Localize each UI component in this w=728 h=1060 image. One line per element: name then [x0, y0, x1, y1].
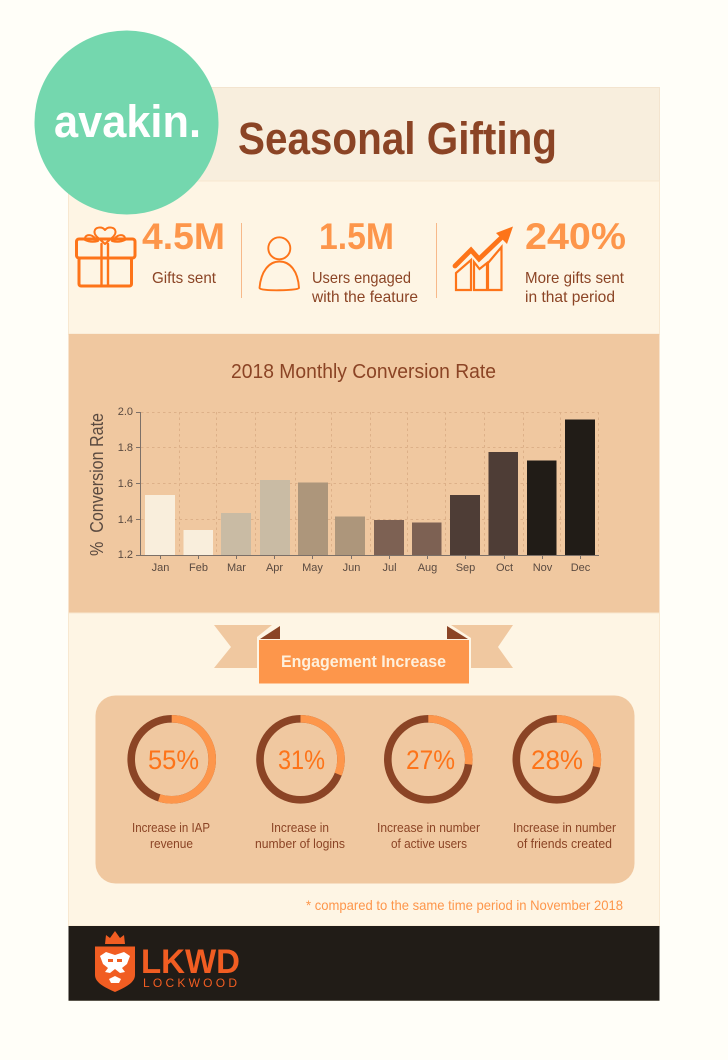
y axis labels: 1.2: [118, 549, 133, 561]
x axis labels: Feb: [189, 562, 208, 574]
x axis labels: Apr: [266, 562, 283, 574]
panel: engagement increase: [68, 613, 660, 926]
stat value: 4.5M: 4.5M: [142, 216, 225, 257]
x axis labels: Nov: [533, 562, 553, 574]
donut: 27% active users: [377, 719, 481, 851]
icon: person: [260, 237, 299, 290]
x axis labels: Jun: [343, 562, 360, 574]
icon: rising chart: [455, 226, 513, 290]
x axis labels: Jul: [382, 562, 397, 574]
donut: 27% active users: Increase in number: [377, 820, 481, 835]
donut: 28% friends created: of friends created: [517, 836, 612, 851]
stat: more gifts: [455, 216, 626, 306]
bars: [145, 420, 595, 555]
stat label: users engaged: [311, 270, 418, 306]
donut: 55% IAP revenue: [131, 719, 212, 851]
x axis labels: Oct: [496, 562, 513, 574]
stat label: users engaged: Users engaged: [312, 270, 411, 287]
stat label: more gifts sent: [525, 270, 625, 306]
donut: 31% logins: 31%: [278, 745, 325, 775]
y axis labels: [118, 406, 133, 561]
stat: gifts sent: [76, 216, 225, 287]
donut: 31% logins: number of logins: [255, 836, 345, 851]
x axis labels: Aug: [418, 562, 437, 574]
y axis labels: 1.6: [118, 478, 133, 490]
y axis labels: 1.8: [118, 442, 133, 454]
x axis labels: Mar: [227, 562, 246, 574]
donut: 55% IAP revenue: revenue: [150, 836, 193, 851]
donut: 28% friends created: 28%: [531, 745, 583, 775]
panel: donut metrics: [96, 696, 634, 884]
panel: key stats: [68, 181, 660, 334]
logo: avakin badge: [34, 30, 218, 214]
donut: 31% logins: [255, 719, 345, 851]
icon: lion shield: [95, 946, 135, 992]
x axis labels: May: [302, 562, 323, 574]
logo: avakin badge: avakin.: [54, 96, 201, 147]
logo: lockwood: [95, 931, 240, 992]
panel: monthly conversion rate: [68, 334, 660, 613]
donut: 28% friends created: [513, 719, 617, 851]
stat value: 1.5M: 1.5M: [319, 216, 394, 257]
x axis labels: Jan: [152, 562, 169, 574]
y axis title: % Conversion Rate: [87, 413, 107, 556]
x axis labels: [152, 562, 591, 574]
donut: 31% logins: Increase in: [271, 820, 329, 835]
chart title: 2018 Monthly Conversion Rate: [231, 361, 496, 383]
ribbon banner: [214, 625, 513, 684]
donut: 28% friends created: Increase in number: [513, 820, 617, 835]
donut: 27% active users: of active users: [391, 836, 467, 851]
x axis labels: Sep: [456, 562, 475, 574]
bar chart: [87, 406, 599, 574]
footnote: * compared to the same time period in November 2018: [306, 897, 623, 913]
donut: 27% active users: 27%: [406, 745, 455, 775]
stat label: more gifts sent: in that period: [525, 289, 615, 306]
title: Seasonal Gifting: [238, 113, 557, 164]
donut: 55% IAP revenue: Increase in IAP: [132, 820, 210, 835]
wordmark: LKWD: [141, 943, 240, 981]
stat label: users engaged: with the feature: [311, 289, 418, 306]
stat: users engaged: [260, 216, 418, 306]
x axis labels: Dec: [571, 562, 591, 574]
panel: footer: [68, 926, 660, 1001]
icon: crown: [105, 931, 125, 944]
tagline: LOCKWOOD: [143, 976, 237, 990]
donut: 55% IAP revenue: 55%: [148, 745, 199, 775]
stat label: gifts sent: Gifts sent: [152, 270, 217, 287]
stat value: 240%: 240%: [525, 216, 626, 257]
y axis labels: 2.0: [118, 406, 133, 418]
y axis labels: 1.4: [118, 514, 133, 526]
stat label: more gifts sent: More gifts sent: [525, 270, 625, 287]
icon: gift box: [76, 227, 135, 286]
panel: header: [68, 88, 660, 182]
banner heading: Engagement Increase: [281, 652, 446, 671]
